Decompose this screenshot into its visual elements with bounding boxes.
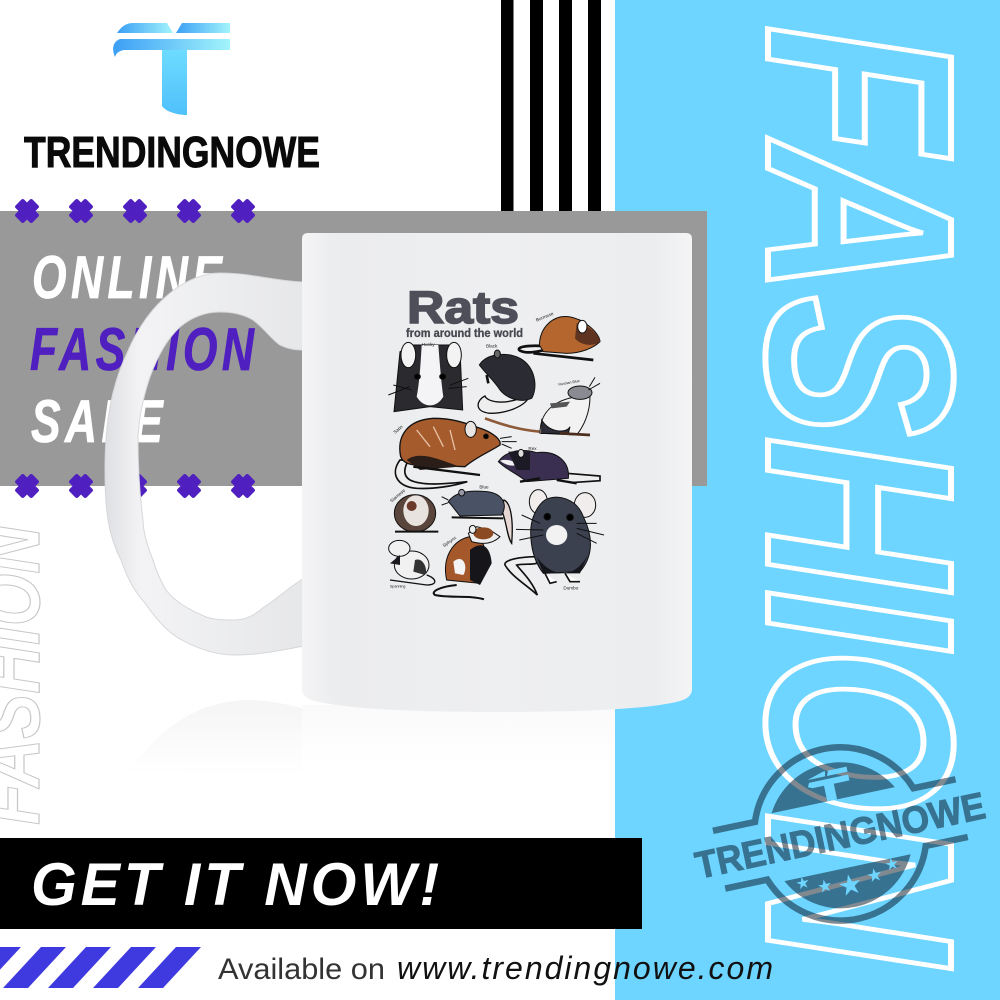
mug body [302, 233, 692, 712]
stamp T icon [805, 767, 853, 805]
stamp disc top [764, 751, 895, 813]
blue slanted stripes [0, 947, 201, 988]
rat: purple [498, 449, 600, 483]
stamp stars: ★ [794, 874, 812, 894]
rat name labels: Sphynx [442, 535, 458, 548]
availability label: Available on [218, 953, 385, 986]
rat name labels: Russian Blue [558, 379, 580, 387]
logo: wordmark: TRENDINGNOWE [24, 128, 320, 177]
sale heading [30, 245, 258, 456]
rat: blue gray [442, 489, 512, 543]
mug handle [105, 273, 304, 655]
background: blue panel [615, 0, 1000, 1000]
mug reflection [128, 700, 615, 775]
rat name labels [389, 311, 580, 590]
availability text [218, 950, 773, 986]
call to action text: GET IT NOW! [31, 850, 443, 918]
stamp dark parts [678, 719, 1000, 949]
black vertical stripes [501, 0, 601, 240]
rat: white spotted [389, 540, 435, 585]
stamp stars: ★ [883, 855, 901, 875]
rat name labels: Dumbo [563, 585, 579, 590]
stamp stars: ★ [835, 867, 866, 903]
mug [105, 233, 692, 712]
stamp ring bottom [725, 837, 980, 944]
rat name labels: Black [486, 343, 498, 348]
stamp ring top [701, 723, 956, 831]
call to action bar [0, 838, 642, 929]
panel: gray sale block [0, 211, 707, 486]
rat name labels: Burmese [535, 311, 555, 323]
print title: Rats [407, 282, 519, 333]
rat name labels: Spanning [390, 584, 405, 588]
heading line: sale: SALE [31, 389, 167, 456]
stamp stars: ★ [865, 864, 885, 887]
rat illustrations [388, 311, 604, 599]
rat name labels: Satin [392, 424, 404, 435]
rat name labels: Siamese [389, 488, 407, 503]
mug print: rats [388, 282, 604, 599]
rat: large brown [395, 418, 517, 489]
stamp stars: ★ [815, 875, 834, 897]
purple crosses: bottom row [10, 469, 260, 503]
website url: www.trendingnowe.com [397, 950, 773, 986]
stamp disc bottom [784, 854, 919, 920]
rat name labels: Husky [422, 342, 435, 347]
rat: white and gray [485, 377, 600, 435]
stamp logo [678, 719, 1000, 949]
rat: dumbo [505, 490, 604, 595]
rat: black [478, 350, 535, 413]
purple crosses: top row [10, 194, 260, 228]
rat: round brown and white [394, 495, 438, 532]
stamp stars [794, 855, 904, 911]
print subtitle: from around the world [406, 328, 523, 340]
heading line: online: ONLINE [32, 245, 226, 312]
rat: hooded face [388, 342, 468, 412]
logo: T icon [113, 23, 230, 115]
rat name labels: Rex [528, 446, 537, 451]
rat: brown top right [519, 317, 600, 360]
rat: brown hamster-like [434, 525, 500, 599]
heading line: fashion: FASHION [30, 317, 258, 384]
rat name labels: Blue [479, 485, 489, 490]
